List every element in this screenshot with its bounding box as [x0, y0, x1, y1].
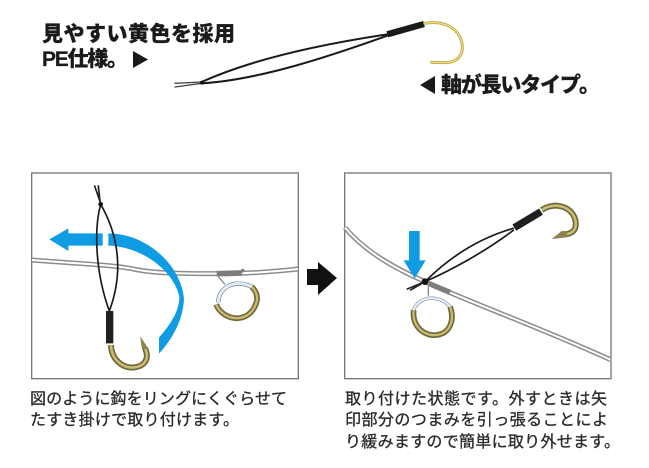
- illustration: long-shank hook with loop: [175, 22, 462, 87]
- panel: threading the ring: [32, 173, 298, 379]
- panel: attached state: [345, 173, 611, 379]
- caption: right: 取り付けた状態です。外すときは矢: [345, 390, 607, 408]
- main line: [32, 260, 298, 274]
- heading: yellow hook PE spec: 見やすい黄色を採用: [42, 22, 235, 46]
- caption: right: り緩みますので簡単に取り外せます。: [345, 433, 620, 451]
- hook with loop: [95, 186, 149, 368]
- hook with loop: [407, 206, 576, 290]
- heading: yellow hook PE spec: PE仕様。: [42, 48, 128, 71]
- caption: right: 印部分のつまみを引っ張ることによ: [345, 411, 608, 429]
- caption: left: [30, 390, 287, 429]
- ring and clip: [413, 283, 452, 335]
- blue down arrow: [404, 231, 426, 278]
- heading: yellow hook PE spec: [42, 22, 235, 71]
- ring and clip: [216, 269, 257, 318]
- heading: long shank type: 軸が長いタイプ。: [441, 73, 600, 97]
- main line: [345, 228, 610, 360]
- arrow: next step: [307, 262, 337, 295]
- hook barb: [552, 231, 567, 239]
- caption: left: 図のように鈎をリングにくぐらせて: [30, 390, 287, 408]
- caption: left: たすき掛けで取り付けます。: [30, 411, 239, 429]
- caption: right: [345, 390, 620, 451]
- blue curved arrow: [49, 228, 184, 354]
- hook barb: [140, 336, 149, 349]
